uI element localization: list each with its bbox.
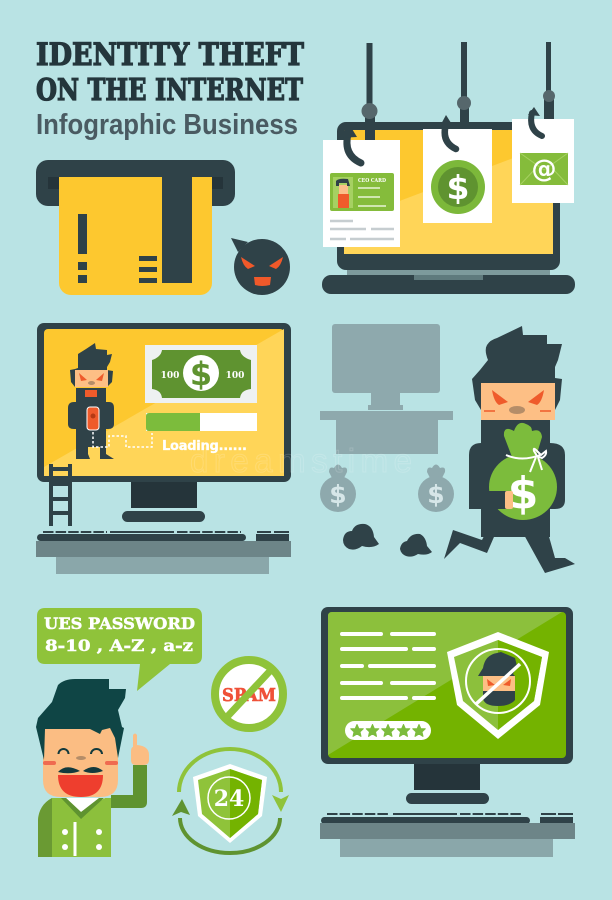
man face	[43, 726, 118, 797]
money bill: $	[190, 355, 212, 393]
hook 1 barb	[338, 124, 357, 138]
speech bubble: UES PASSWORD	[44, 614, 195, 633]
title: Infographic Business	[36, 109, 298, 141]
money bill	[145, 345, 257, 403]
title: IDENTITY THEFT	[36, 37, 304, 73]
icon: ATM card slot	[36, 160, 235, 295]
keyboard and desk	[36, 532, 291, 574]
security monitor	[320, 607, 575, 857]
watermark: dreamstime	[190, 442, 412, 479]
tag: dollar coin	[423, 129, 492, 223]
progress bar	[146, 413, 257, 431]
smiling man	[36, 679, 149, 857]
monitor screen	[37, 323, 291, 482]
password field	[345, 721, 431, 740]
no spam badge: SPAM	[222, 685, 276, 706]
smoke puffs	[343, 524, 432, 557]
24 hour shield: 24	[214, 786, 244, 812]
title	[36, 37, 304, 141]
money bill: 100	[161, 371, 179, 381]
money bag: $	[508, 468, 538, 519]
dotted connection	[93, 432, 152, 447]
monitor with hacker	[36, 323, 291, 574]
no spam badge	[215, 660, 283, 728]
hook 2	[445, 124, 456, 149]
monitor stand	[406, 764, 489, 804]
tag: ID card: CEO CARD	[358, 178, 386, 184]
hook 1	[347, 134, 361, 163]
grey money bag right: $	[427, 480, 445, 509]
shield	[193, 764, 267, 843]
money bill: 100	[226, 371, 244, 381]
man hand	[131, 734, 149, 765]
grey desk with monitor	[320, 324, 453, 454]
icon: devil virus	[231, 238, 290, 295]
ladder	[51, 464, 70, 526]
tag: dollar coin: $	[447, 168, 469, 207]
thief running with money bag	[444, 326, 575, 573]
24 hour shield	[172, 749, 289, 853]
thief back leg	[444, 530, 497, 559]
grey money bag right	[418, 464, 454, 512]
tag: email	[512, 119, 574, 203]
shield with blocked thief	[447, 632, 549, 739]
man body	[38, 765, 147, 857]
title: ON THE INTERNET	[36, 73, 304, 108]
tag: email: @	[532, 154, 556, 183]
loading text: Loading......	[162, 439, 247, 454]
laptop with phishing hooks	[322, 42, 575, 294]
keyboard and desk	[320, 814, 575, 857]
grey money bag left: $	[329, 480, 347, 509]
laptop	[322, 122, 575, 294]
hacker on screen	[68, 343, 114, 459]
speech bubble	[37, 608, 202, 691]
hook 3 barb	[528, 107, 540, 116]
speech bubble: 8-10 , A-Z , a-z	[45, 636, 193, 655]
money bag	[469, 423, 557, 520]
thief face	[481, 383, 555, 420]
man hair	[36, 679, 126, 760]
grey money bag left	[320, 464, 356, 512]
thief hair and hood	[472, 326, 562, 410]
monitor screen	[321, 607, 573, 764]
monitor stand	[122, 482, 205, 522]
cycle arrows	[172, 749, 289, 853]
tag: ID card	[323, 140, 400, 247]
hook 2 barb	[440, 115, 453, 126]
hook lines	[362, 42, 555, 141]
text lines	[342, 634, 434, 698]
hook 3	[531, 113, 542, 136]
thief body	[469, 419, 565, 537]
thief front leg	[523, 533, 575, 573]
